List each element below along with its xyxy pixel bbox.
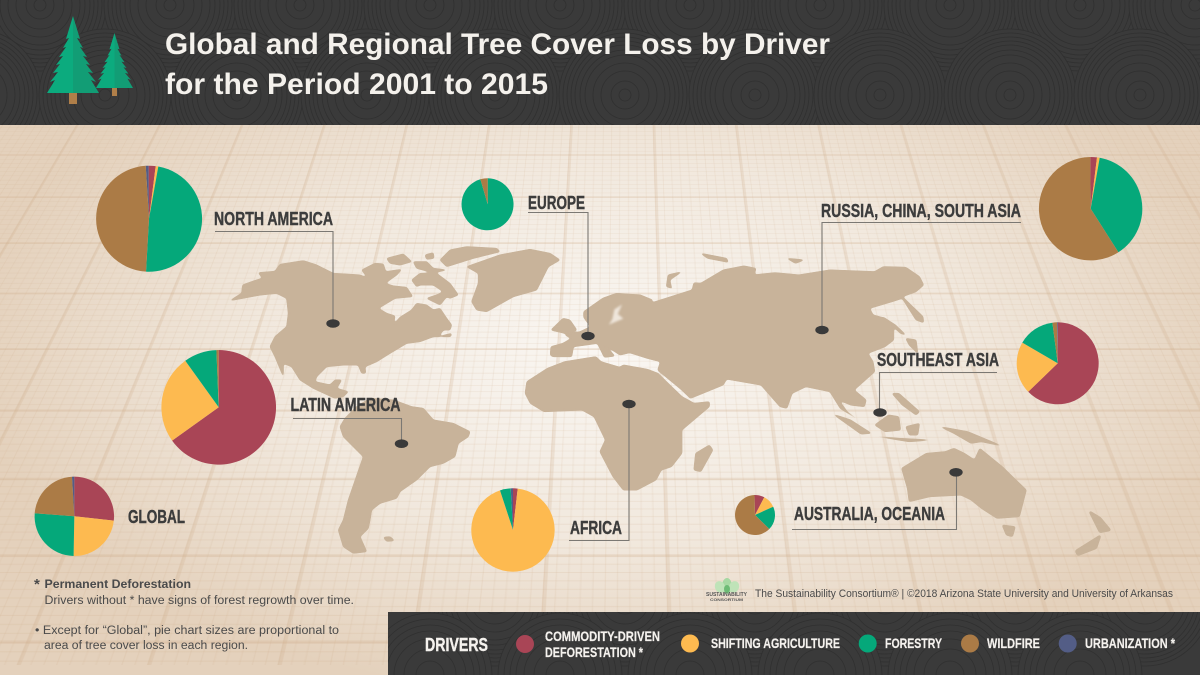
logo: The Sustainability Consortium <box>706 578 747 602</box>
pie chart: Australia, Oceania <box>735 495 775 535</box>
legend item: forestry <box>859 634 942 652</box>
legend item: commodity-driven deforestation: DEFORESTATION * <box>545 644 643 660</box>
callout: Southeast Asia: SOUTHEAST ASIA <box>877 350 999 370</box>
header band <box>0 0 1200 125</box>
legend item: urbanization <box>1059 634 1175 652</box>
legend title: DRIVERS <box>425 635 488 655</box>
legend item: forestry: FORESTRY <box>885 635 942 651</box>
notes: area of tree cover loss in each region. <box>44 640 248 652</box>
title: Global and Regional Tree Cover Loss by Driver <box>165 28 830 61</box>
legend item: shifting agriculture <box>681 634 840 652</box>
notes: Drivers without * have signs of forest regrowth over time. <box>44 595 354 607</box>
pie chart: Russia, China, South Asia <box>1039 157 1142 260</box>
callout: North America: NORTH AMERICA <box>214 209 333 229</box>
callout: Southeast Asia <box>873 350 999 417</box>
callout: Russia, China, South Asia <box>815 201 1021 334</box>
world map <box>230 247 1110 555</box>
notes: • Except for “Global”, pie chart sizes are proportional to <box>35 625 339 637</box>
callout: Latin America <box>290 395 408 448</box>
logo: The Sustainability Consortium: SUSTAINABILITY <box>706 592 747 598</box>
pie chart: Southeast Asia <box>1017 322 1099 404</box>
notes: * <box>34 576 40 593</box>
callout: North America <box>214 209 340 328</box>
callout: Russia, China, South Asia: RUSSIA, CHINA, SOUTH ASIA <box>821 201 1021 221</box>
title <box>165 28 830 101</box>
callout: Europe <box>528 193 595 340</box>
callout: Latin America: LATIN AMERICA <box>290 395 400 415</box>
logo: The Sustainability Consortium: CONSORTIUM <box>710 597 744 602</box>
pie chart: Latin America <box>161 350 276 465</box>
callout: Australia, Oceania <box>792 468 963 530</box>
pie chart: Africa <box>471 488 555 572</box>
callout: Europe: EUROPE <box>528 193 585 213</box>
label: Global: GLOBAL <box>128 507 185 527</box>
legend item: commodity-driven deforestation: COMMODITY-DRIVEN <box>545 628 660 644</box>
legend item: commodity-driven deforestation <box>516 628 660 660</box>
notes <box>34 576 354 652</box>
map: Eurasia, Africa, Oceania <box>525 253 1026 537</box>
map: New Zealand <box>1076 512 1110 555</box>
callout: Africa: AFRICA <box>570 518 622 538</box>
icon: pine trees <box>47 16 133 104</box>
legend item: wildfire: WILDFIRE <box>987 635 1040 651</box>
legend item: wildfire <box>961 634 1040 652</box>
callout: Australia, Oceania: AUSTRALIA, OCEANIA <box>794 504 945 524</box>
pie chart: North America <box>96 166 202 272</box>
legend bar <box>388 612 1200 675</box>
pie chart: Europe <box>462 178 514 230</box>
attribution: The Sustainability Consortium® | ©2018 Arizona State University and University of Arkansas <box>755 588 1173 600</box>
notes: Permanent Deforestation <box>44 579 191 591</box>
callout: Africa <box>569 400 636 540</box>
pie chart: Global <box>35 477 114 556</box>
legend item: shifting agriculture: SHIFTING AGRICULTURE <box>711 635 840 651</box>
title: for the Period 2001 to 2015 <box>165 68 548 101</box>
map: the Americas and Greenland <box>230 247 560 553</box>
legend item: urbanization: URBANIZATION * <box>1085 635 1175 651</box>
